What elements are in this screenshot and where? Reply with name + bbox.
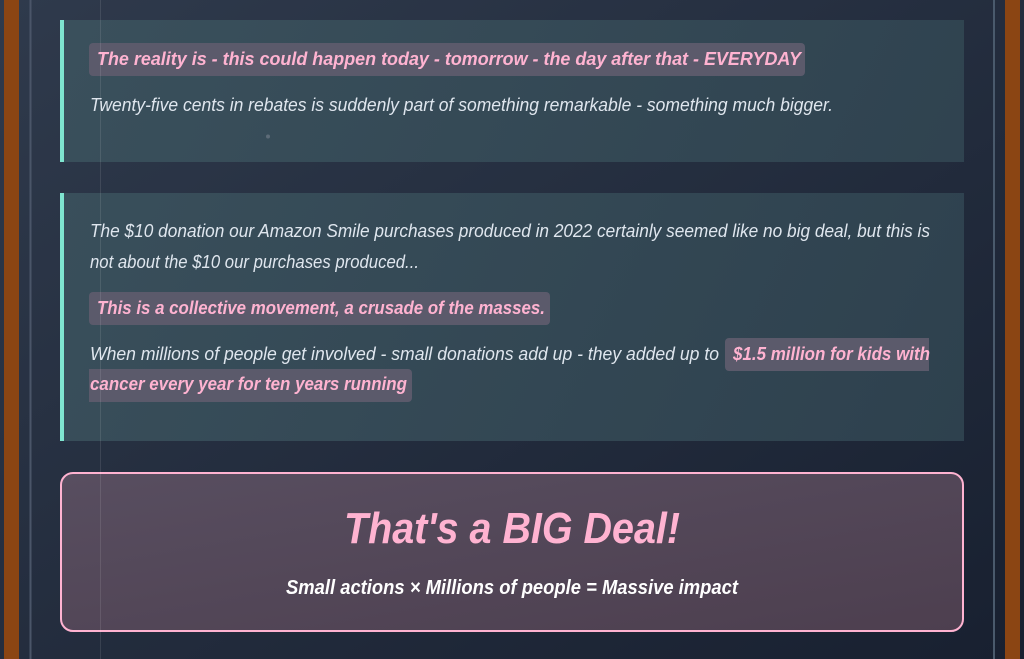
heading: big deal: That's a BIG Deal!: [344, 504, 680, 553]
dot: [266, 134, 270, 138]
right orange frame bar: [1005, 0, 1020, 659]
subheading: formula: Small actions × Millions of people = Massive impact: [286, 577, 739, 599]
text: when millions: When millions of people get involved - small donations add up - they added up to: [90, 344, 719, 364]
highlight: 1.5 million: [89, 338, 930, 402]
callout: big deal: [61, 473, 963, 631]
highlight: the reality is: [89, 43, 805, 76]
text: the $10 donation: [90, 221, 930, 272]
highlight: collective movement: This is a collective movement, a crusade of the masses.: [97, 298, 545, 318]
text: twenty-five cents: Twenty-five cents in rebates is suddenly part of something remarkable - something much bigger.: [90, 95, 833, 115]
highlight: the reality is: The reality is - this could happen today - tomorrow - the day after that - EVERYDAY: [97, 49, 803, 69]
left orange frame bar: [4, 0, 19, 659]
highlight: collective movement: [89, 292, 550, 325]
highlight: 1.5 million: cancer every year for ten years running: [90, 374, 407, 394]
text: the $10 donation: not about the $10 our purchases produced...: [90, 252, 419, 272]
panel: collective movement: [60, 193, 964, 441]
highlight: 1.5 million: $1.5 million for kids with: [732, 344, 930, 364]
panel: the reality: [60, 20, 964, 162]
text: the $10 donation: The $10 donation our Amazon Smile purchases produced in 2022 certainly seemed like no big deal, but this is: [90, 221, 930, 241]
